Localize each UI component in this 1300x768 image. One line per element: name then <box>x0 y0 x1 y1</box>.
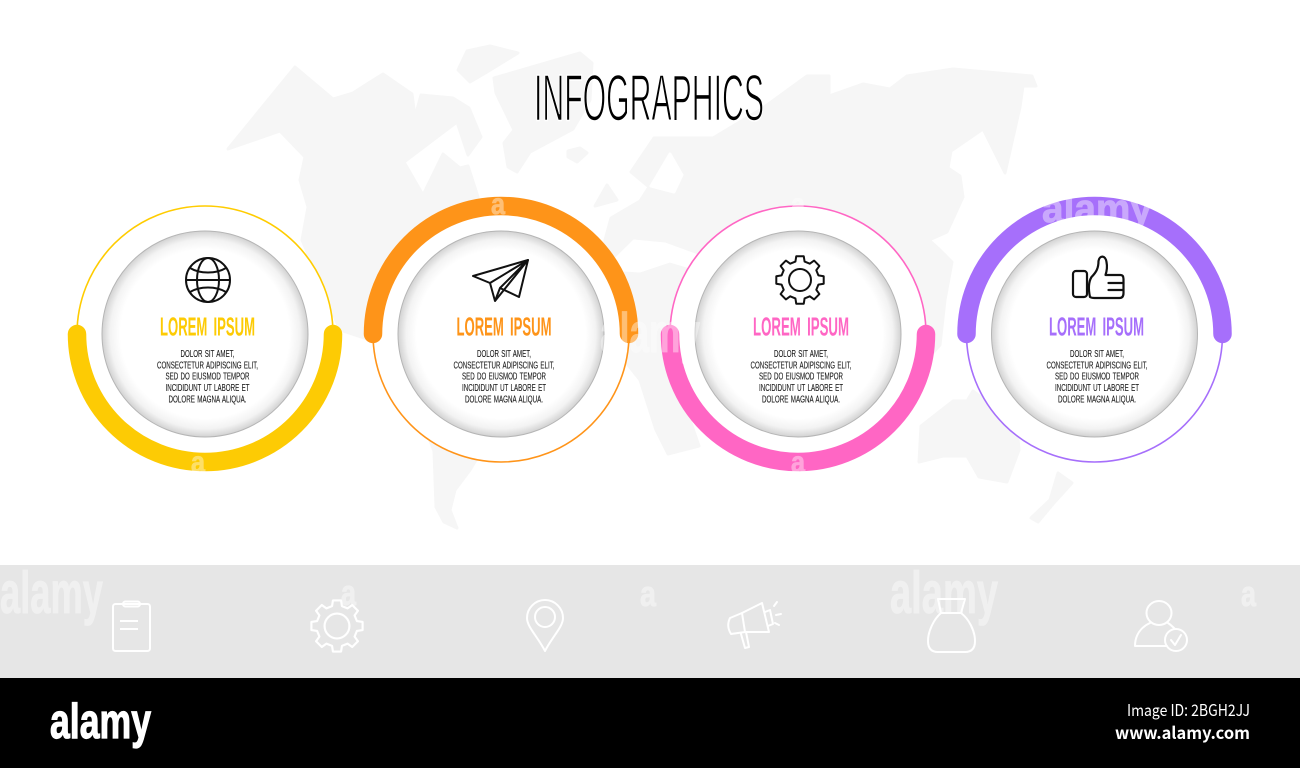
icon: outline gear <box>311 600 363 652</box>
panel: step 2 orange <box>373 206 629 462</box>
icon: gear <box>776 256 824 304</box>
body text: SED DO EIUSMOD TEMPOR <box>1055 372 1139 383</box>
body text: SED DO EIUSMOD TEMPOR <box>166 372 250 383</box>
body text <box>157 349 258 405</box>
body text: DOLORE MAGNA ALIQUA. <box>1058 394 1136 405</box>
watermarks: alamy <box>890 560 998 626</box>
body text: INCIDIDUNT UT LABORE ET <box>1055 383 1139 394</box>
icon: verified user <box>1135 601 1187 651</box>
body text: CONSECTETUR ADIPISCING ELIT, <box>1046 360 1147 371</box>
body text: DOLORE MAGNA ALIQUA. <box>465 394 543 405</box>
body text: CONSECTETUR ADIPISCING ELIT, <box>750 360 851 371</box>
body text: INCIDIDUNT UT LABORE ET <box>462 383 546 394</box>
heading: LOREM IPSUM <box>160 314 255 342</box>
white disc with rings <box>670 206 926 462</box>
infographic canvas: INFOGRAPHICS <box>534 60 764 134</box>
panel: step 4 purple <box>966 206 1222 462</box>
watermarks: alamy <box>0 560 103 626</box>
white disc with rings <box>373 206 629 462</box>
watermarks <box>0 187 1257 626</box>
panel: step 1 yellow <box>77 206 333 462</box>
world map background <box>228 46 1072 528</box>
watermarks: alamy <box>600 301 700 364</box>
watermarks: a <box>1241 573 1257 614</box>
body text: CONSECTETUR ADIPISCING ELIT, <box>157 360 258 371</box>
inner circle <box>398 231 604 437</box>
icon: thumbs up <box>1073 257 1124 298</box>
body text: SED DO EIUSMOD TEMPOR <box>462 372 546 383</box>
image id: Image ID: 2BGH2JJ <box>1127 697 1250 721</box>
panel: step 3 pink <box>670 206 926 462</box>
white disc with rings <box>966 206 1222 462</box>
body text: CONSECTETUR ADIPISCING ELIT, <box>454 360 554 371</box>
body text: DOLOR SIT AMET, <box>477 349 531 360</box>
body text <box>750 349 852 405</box>
body text: DOLORE MAGNA ALIQUA. <box>168 394 246 405</box>
inner circle <box>695 231 901 437</box>
watermarks: a <box>640 573 657 614</box>
watermarks: a <box>791 188 805 221</box>
inner circle <box>992 231 1198 437</box>
icon: clipboard <box>113 602 150 651</box>
body text: INCIDIDUNT UT LABORE ET <box>759 383 843 394</box>
footer logo: alamy <box>50 695 151 749</box>
body text: DOLOR SIT AMET, <box>774 349 828 360</box>
body text: DOLORE MAGNA ALIQUA. <box>762 394 840 405</box>
watermarks: a <box>791 446 805 479</box>
icon: megaphone <box>728 602 781 648</box>
inner circle <box>102 231 308 437</box>
body text: DOLOR SIT AMET, <box>1070 349 1124 360</box>
heading: LOREM IPSUM <box>1049 314 1144 342</box>
body text: INCIDIDUNT UT LABORE ET <box>166 383 250 394</box>
body text <box>454 349 554 405</box>
body text: DOLOR SIT AMET, <box>180 349 234 360</box>
watermarks: a <box>191 446 205 479</box>
heading: LOREM IPSUM <box>456 314 552 342</box>
white disc with rings <box>77 206 333 462</box>
icon: money bag <box>928 599 975 652</box>
icon: globe <box>186 258 230 302</box>
icon strip background <box>0 565 1300 678</box>
body text <box>1046 349 1148 405</box>
footer bar <box>0 678 1300 768</box>
watermarks: a <box>341 572 357 613</box>
watermarks: alamy <box>1042 187 1153 231</box>
body text: SED DO EIUSMOD TEMPOR <box>759 372 843 383</box>
website: www.alamy.com <box>1115 720 1250 744</box>
heading: LOREM IPSUM <box>753 314 849 342</box>
icon: location pin <box>527 600 563 651</box>
watermarks: a <box>491 188 505 221</box>
icon: paper plane <box>473 260 528 301</box>
